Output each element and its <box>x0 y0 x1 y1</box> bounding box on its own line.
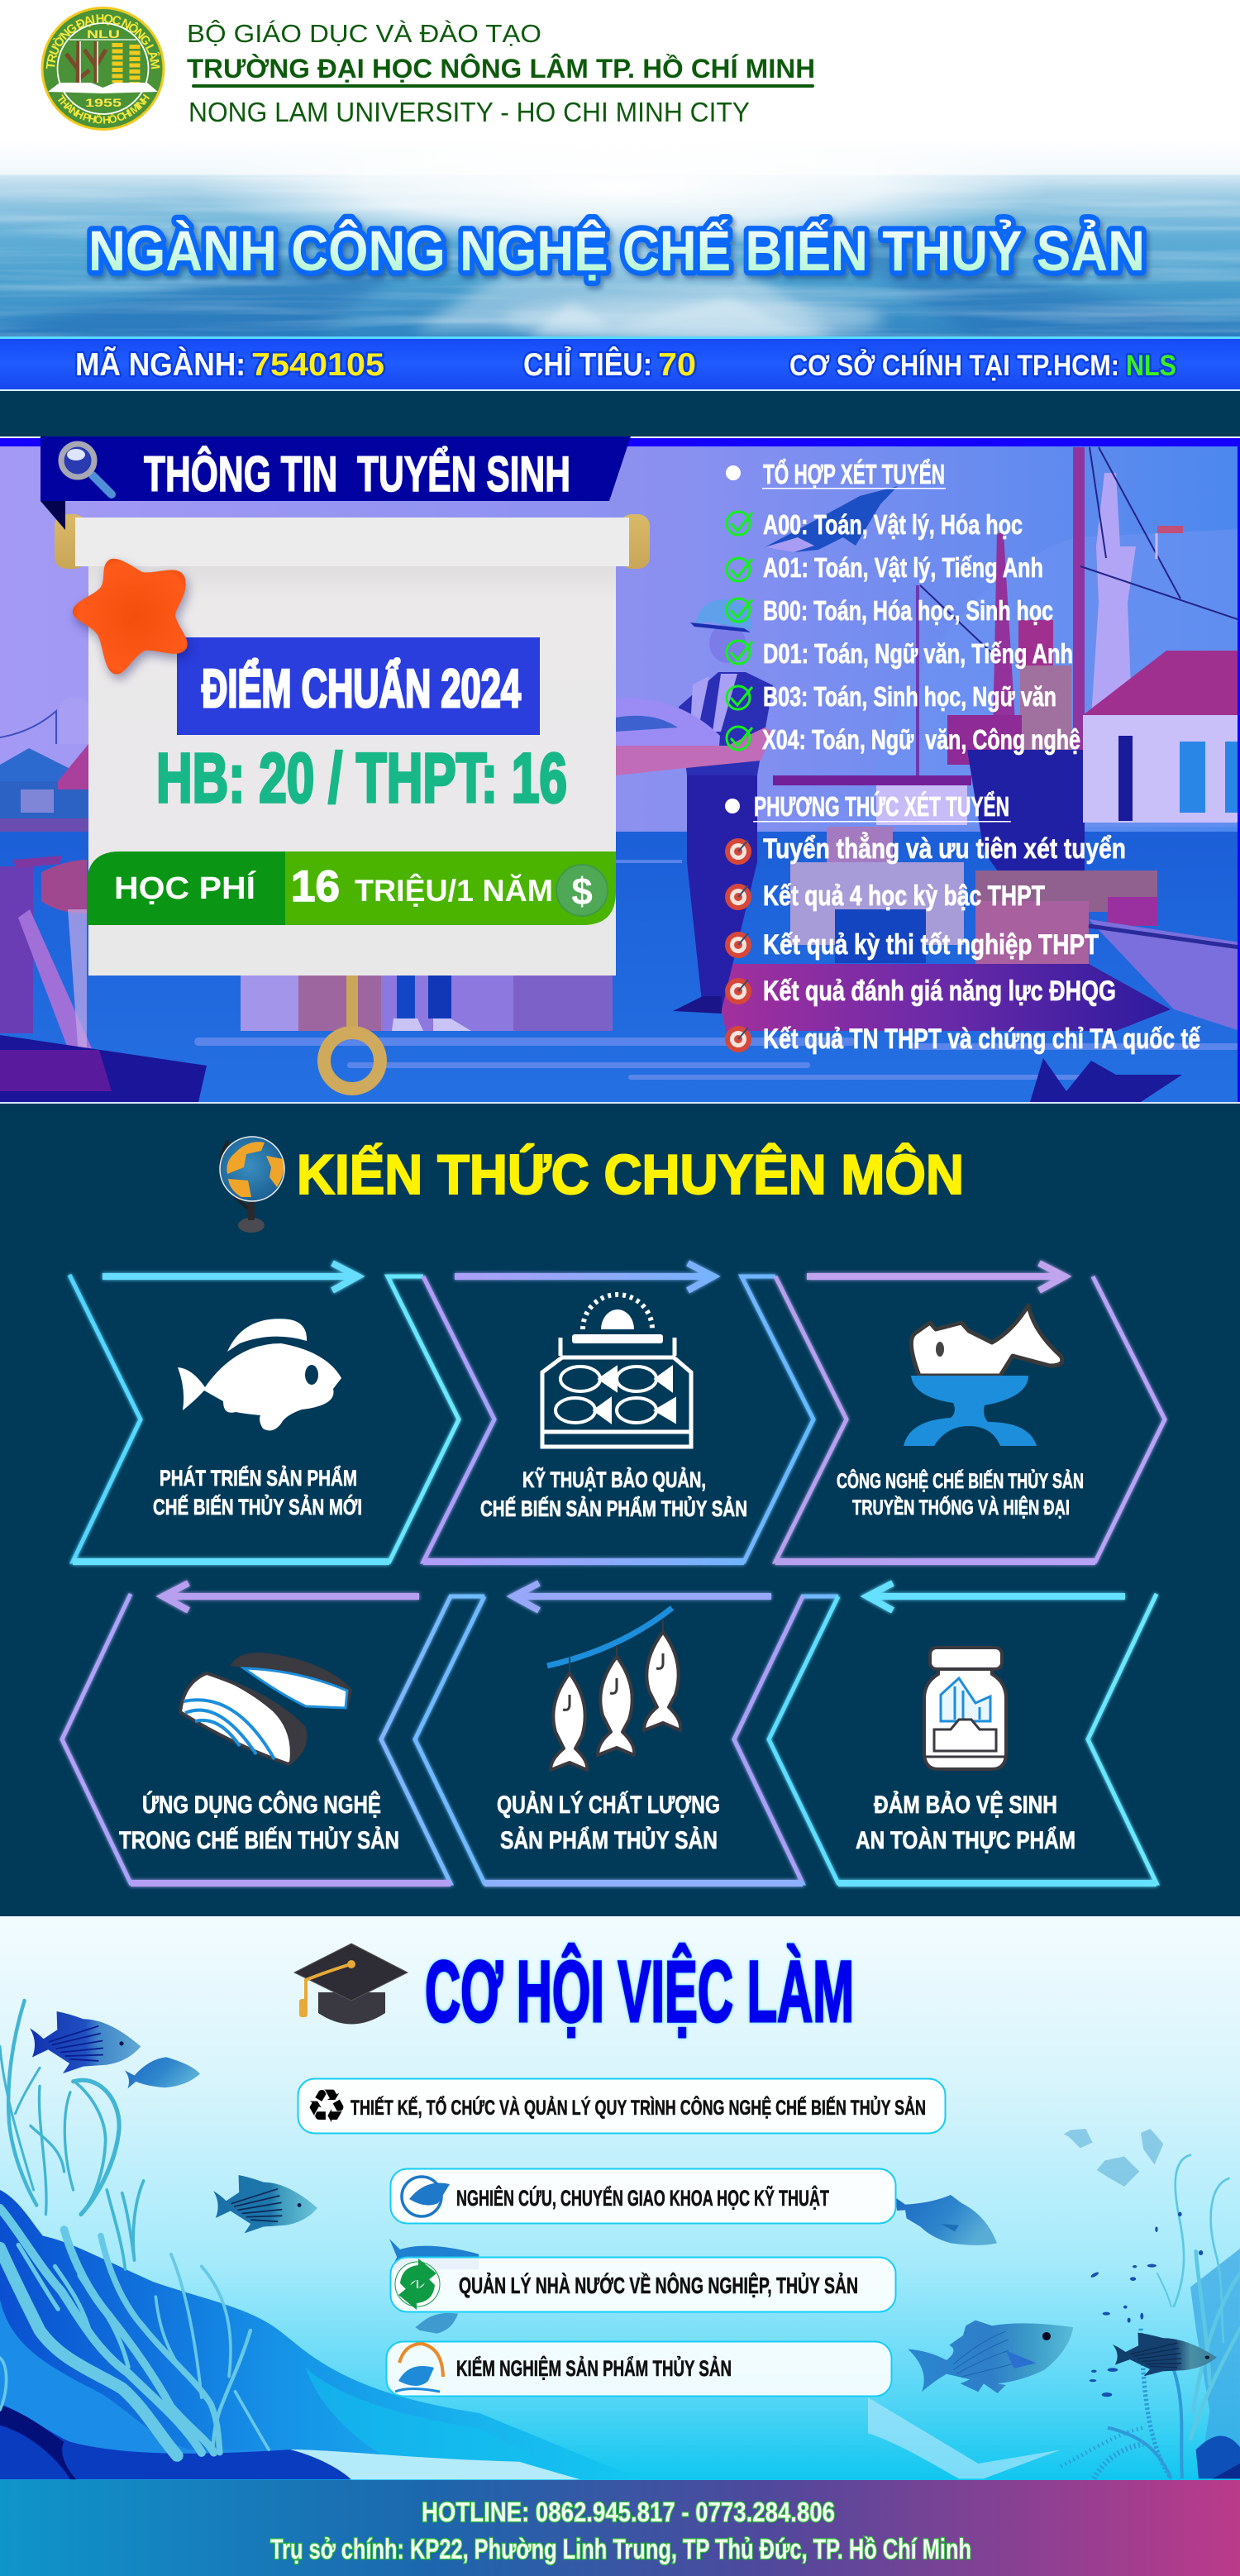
chevron 5 <box>415 1583 838 1883</box>
rows <box>762 509 1080 755</box>
illustration: fish and coral right <box>868 2129 1240 2478</box>
icon: hanging fish <box>547 1608 680 1770</box>
chevron 1 <box>69 1263 459 1562</box>
label: ĐẢM BẢO VỆ SINH <box>874 1791 1057 1819</box>
illustration: pier <box>0 856 207 1102</box>
text: english name: NONG LAM UNIVERSITY - HO CHI MINH CITY <box>188 97 750 127</box>
icon: dollar: $ <box>571 870 593 913</box>
illustration: water streaks <box>194 860 1240 1080</box>
label: AN TOÀN THỰC PHẨM <box>856 1826 1075 1854</box>
tuition bar: HỌC PHÍ <box>114 870 257 906</box>
label: TRONG CHẾ BIẾN THỦY SẢN <box>119 1826 399 1854</box>
job 4: KIỂM NGHIỆM SẢN PHẨM THỦY SẢN <box>456 2354 732 2381</box>
job 1 <box>298 2078 946 2134</box>
job 1: THIẾT KẾ, TỔ CHỨC VÀ QUẢN LÝ QUY TRÌNH CÔNG NGHỆ CHẾ BIẾN THỦY SẢN <box>351 2095 926 2120</box>
chevron 4 <box>62 1583 484 1883</box>
header: university <box>0 0 1240 141</box>
rows: X04: Toán, Ngữ văn, Công nghệ <box>762 724 1080 755</box>
rows: B03: Toán, Sinh học, Ngữ văn <box>763 681 1056 712</box>
rows: D01: Toán, Ngữ văn, Tiếng Anh <box>763 638 1073 669</box>
banner: ocean <box>0 124 1240 340</box>
rows: Kết quả kỳ thi tốt nghiệp THPT <box>763 929 1099 961</box>
chevron 3 <box>775 1263 1165 1562</box>
illustration: crates behind scroll <box>241 976 613 1031</box>
panel: specialised knowledge <box>0 1104 1240 1916</box>
job 2 <box>390 2169 896 2224</box>
chevron 2 <box>423 1263 813 1562</box>
bullet heading <box>725 791 1011 822</box>
score heading <box>177 637 540 735</box>
illustration: left houses <box>0 698 88 832</box>
target icons <box>725 838 751 1052</box>
job 3: QUẢN LÝ NHÀ NƯỚC VỀ NÔNG NGHIỆP, THỦY SẢN <box>459 2272 858 2298</box>
label: CÔNG NGHỆ CHẾ BIẾN THỦY SẢN <box>837 1468 1084 1493</box>
job 2: NGHIÊN CỨU, CHUYỂN GIAO KHOA HỌC KỸ THUẬT <box>456 2185 829 2211</box>
label <box>837 1468 1084 1519</box>
bullet heading: PHƯƠNG THỨC XÉT TUYỂN <box>754 791 1009 822</box>
icon: research fish <box>402 2177 450 2216</box>
tuition bar: TRIỆU/1 NĂM <box>355 873 553 908</box>
text: quota: 70 <box>658 347 696 383</box>
label: CHẾ BIẾN THỦY SẢN MỚI <box>153 1493 362 1519</box>
label <box>153 1464 362 1519</box>
illustration: ship and house <box>712 447 1240 1102</box>
job 3 <box>390 2257 896 2311</box>
bullet heading <box>726 459 946 489</box>
job 4 <box>387 2341 891 2396</box>
illustration: fisherman <box>616 599 773 1014</box>
icon: fish fillet <box>180 1653 352 1764</box>
text: major code: MÃ NGÀNH: <box>75 346 246 383</box>
icon: NLU logo <box>41 7 165 131</box>
label <box>480 1466 747 1521</box>
rows: Kết quả đánh giá năng lực ĐHQG <box>763 976 1116 1007</box>
icon: graduation cap <box>294 1944 408 2024</box>
scroll handle <box>324 976 380 1089</box>
checks <box>727 512 752 750</box>
rows: A01: Toán, Vật lý, Tiếng Anh <box>763 552 1043 583</box>
label <box>497 1791 720 1854</box>
list: admission methods <box>725 791 1200 1055</box>
score values: HB: 20 / THPT: 16 <box>156 739 567 817</box>
score heading: ĐIỂM CHUẨN 2024 <box>202 658 521 718</box>
label: CHẾ BIẾN SẢN PHẨM THỦY SẢN <box>480 1495 747 1521</box>
text: ministry: BỘ GIÁO DỤC VÀ ĐÀO TẠO <box>187 19 541 48</box>
tuition bar <box>87 852 616 925</box>
rows: A00: Toán, Vật lý, Hóa học <box>763 509 1023 540</box>
label: QUẢN LÝ CHẤT LƯỢNG <box>497 1791 720 1819</box>
icon: recycle: ♻ <box>306 2080 347 2134</box>
label <box>856 1791 1075 1854</box>
rows: Kết quả 4 học kỳ bậc THPT <box>763 880 1045 912</box>
list: subject combinations <box>726 459 1080 755</box>
info band <box>0 336 1240 392</box>
rows: B00: Toán, Hóa học, Sinh học <box>763 595 1053 626</box>
icon: NLU logo: 1955 <box>85 96 122 109</box>
label: PHÁT TRIỂN SẢN PHẨM <box>160 1464 357 1491</box>
rows <box>763 832 1200 1055</box>
icon: green recycle <box>395 2259 440 2310</box>
text: campus: CƠ SỞ CHÍNH TẠI TP.HCM: <box>789 349 1119 382</box>
chevron 6 <box>769 1583 1157 1883</box>
text: quota: CHỈ TIÊU: <box>523 346 652 383</box>
illustration: waves and seaweed left <box>0 2001 641 2479</box>
text: major code: 7540105 <box>251 347 384 383</box>
rows: Tuyển thẳng và ưu tiên xét tuyển <box>763 832 1126 865</box>
icon: jar <box>924 1648 1006 1769</box>
icon: dollar <box>556 865 608 916</box>
panel: admissions illustration <box>0 436 1240 1104</box>
heading text: THÔNG TIN TUYỂN SINH <box>144 446 570 502</box>
icon: NLU logo: NLU <box>87 27 120 41</box>
tuition bar: 16 <box>291 862 340 911</box>
hotline: HOTLINE: 0862.945.817 - 0773.284.806 <box>422 2497 835 2527</box>
icon: inspection fish <box>395 2344 443 2392</box>
ribbon: admissions heading <box>41 436 631 530</box>
star <box>73 559 188 675</box>
label: SẢN PHẨM THỦY SẢN <box>500 1826 718 1854</box>
title: NGÀNH CÔNG NGHỆ CHẾ BIẾN THUỶ SẢN <box>88 219 1145 283</box>
icon: fish bowl <box>904 1305 1062 1446</box>
label: KỸ THUẬT BẢO QUẢN, <box>522 1466 706 1492</box>
icon: magnifier <box>61 444 112 494</box>
label: TRUYỀN THỐNG VÀ HIỆN ĐẠI <box>852 1495 1070 1519</box>
panel: job opportunities <box>0 1916 1240 2480</box>
icon: globe <box>220 1137 284 1233</box>
bullet heading: TỔ HỢP XÉT TUYỂN <box>763 459 945 489</box>
scroll roller <box>55 514 650 569</box>
icon: tray <box>542 1295 693 1447</box>
icon: NLU logo: TRƯỜNG ĐẠI HỌC NÔNG LÂM <box>46 14 160 69</box>
text: major code <box>75 346 384 383</box>
heading: KIẾN THỨC CHUYÊN MÔN <box>297 1143 964 1206</box>
illustration: fish left <box>30 2011 479 2334</box>
label: ỨNG DỤNG CÔNG NGHỆ <box>142 1791 381 1819</box>
icon: NLU logo: THÀNH PHỐ HỒ CHÍ MINH <box>58 94 150 124</box>
icon: fish <box>178 1319 341 1430</box>
scroll paper <box>88 566 616 976</box>
address: Trụ sở chính: KP22, Phường Linh Trung, TP Thủ Đức, TP. Hồ Chí Minh <box>270 2534 971 2565</box>
label <box>119 1791 399 1854</box>
footer <box>0 2480 1240 2576</box>
text: campus: NLS <box>1126 350 1176 382</box>
scroll <box>55 514 650 1089</box>
text: university name: TRƯỜNG ĐẠI HỌC NÔNG LÂM TP. HỒ CHÍ MINH <box>187 54 815 83</box>
heading: CƠ HỘI VIỆC LÀM <box>425 1943 854 2040</box>
